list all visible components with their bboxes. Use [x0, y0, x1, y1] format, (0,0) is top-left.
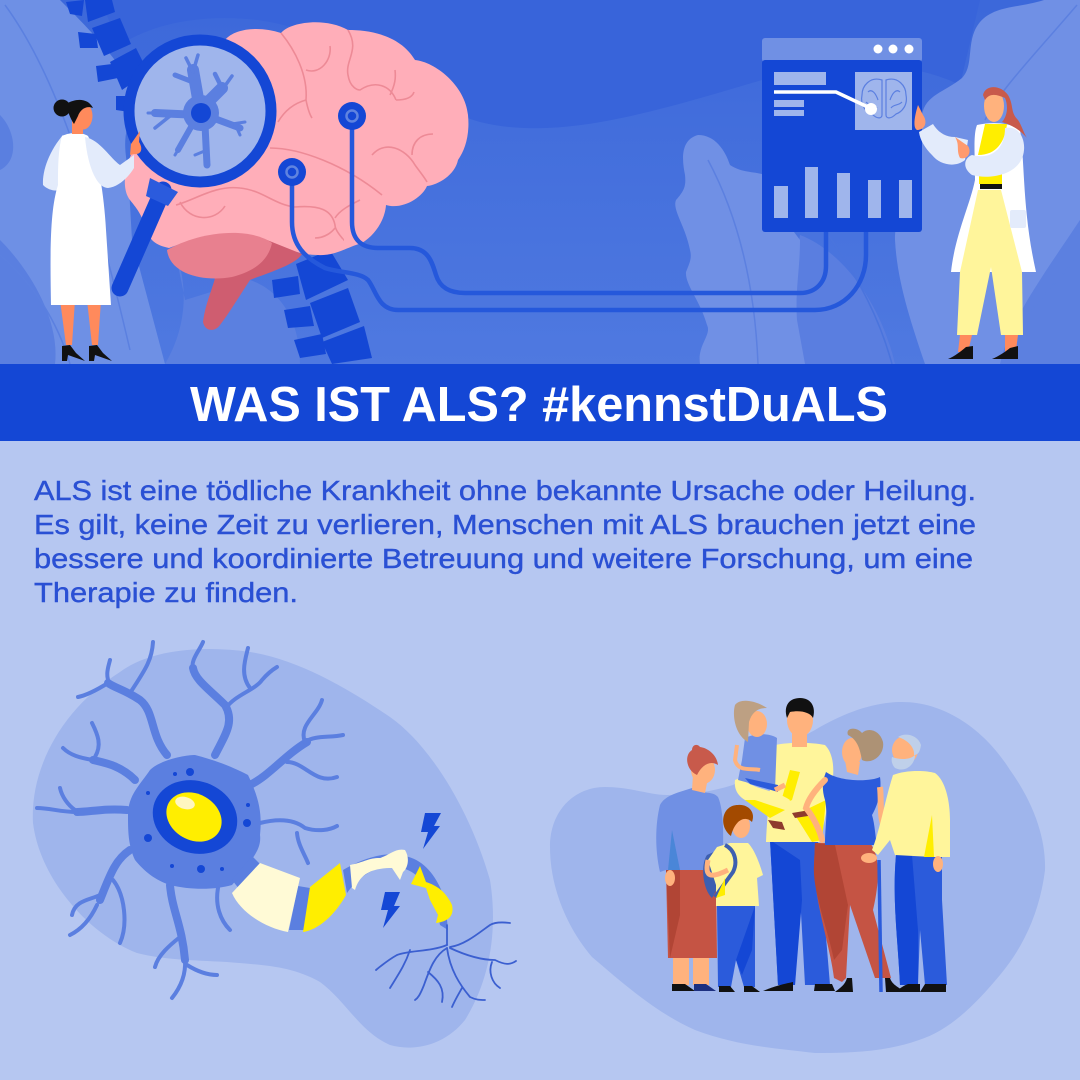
- shoes: [835, 978, 853, 992]
- lab coat: [951, 123, 1036, 272]
- hair: [898, 735, 921, 755]
- woman with magnifier: [43, 100, 141, 361]
- window dots: [874, 44, 914, 54]
- trousers: [895, 855, 947, 985]
- family background blob: [550, 702, 1045, 1053]
- sweater: [656, 788, 723, 872]
- child arm: [735, 745, 760, 770]
- hands: [914, 105, 925, 130]
- lens: [129, 40, 271, 182]
- lens soma: [183, 95, 219, 131]
- hair: [983, 87, 1027, 138]
- right background leaves: [675, 0, 1080, 364]
- boy trousers: [717, 906, 755, 987]
- woman left legs: [673, 957, 689, 985]
- arm across: [965, 128, 1024, 177]
- beard: [892, 755, 915, 770]
- arm left: [806, 780, 825, 840]
- nucleus: [157, 783, 231, 851]
- legs: [60, 300, 75, 345]
- brain folds: [176, 30, 433, 240]
- belt: [980, 184, 1002, 189]
- woman presenting: [914, 87, 1036, 359]
- boy shoes: [719, 986, 735, 992]
- trousers: [957, 190, 1023, 335]
- woman with ponytail: [656, 745, 723, 991]
- shoes: [948, 346, 973, 359]
- woman left shoes: [672, 984, 695, 991]
- axon: [232, 850, 453, 932]
- man head: [787, 703, 813, 737]
- backpack strap: [715, 845, 735, 897]
- child legs: [735, 778, 790, 822]
- damaged myelin yellow: [411, 866, 453, 923]
- elderly man: [861, 735, 950, 992]
- man trousers: [770, 840, 830, 985]
- coat pocket: [1010, 210, 1026, 228]
- window body: [762, 60, 922, 232]
- magnifying glass: [120, 40, 271, 288]
- man carrying child: [763, 698, 835, 991]
- myelin yellow: [303, 863, 346, 932]
- myelin cream: [232, 863, 300, 932]
- hand: [665, 870, 675, 886]
- woman in blue: [806, 729, 905, 992]
- damaged myelin cream: [350, 850, 408, 890]
- head: [984, 90, 1004, 122]
- monitor window: [762, 38, 922, 232]
- hair: [847, 729, 883, 761]
- head: [691, 756, 715, 784]
- magnifier collar: [146, 178, 178, 206]
- title band: [0, 364, 1080, 441]
- boy hair: [723, 805, 753, 836]
- hero background: [0, 0, 1080, 365]
- axon terminals: [376, 922, 516, 1007]
- neuron background blob: [33, 649, 493, 1048]
- nucleus highlight: [174, 795, 196, 811]
- lightning bolts: [381, 813, 441, 928]
- head: [842, 738, 862, 766]
- cane: [879, 860, 881, 992]
- electrodes: [278, 102, 366, 186]
- neck: [692, 775, 708, 793]
- trousers: [814, 843, 891, 982]
- lens nucleus: [191, 103, 211, 123]
- child hair: [734, 701, 767, 742]
- boy head: [732, 814, 750, 838]
- neuron illustration: [33, 642, 516, 1048]
- bar chart: [774, 167, 912, 218]
- intro text block: Therapie zu finden.: [34, 577, 298, 608]
- pointer line: [774, 92, 870, 108]
- skirt: [666, 870, 717, 958]
- man shoes: [763, 982, 793, 991]
- hair bun: [54, 100, 70, 116]
- text placeholders: [774, 72, 826, 116]
- shoes: [62, 345, 85, 361]
- sweater: [872, 771, 950, 857]
- head: [74, 102, 92, 130]
- top: [823, 772, 881, 845]
- head: [892, 736, 918, 764]
- right hand: [933, 856, 943, 872]
- man shirt: [766, 743, 833, 842]
- boy shirt: [708, 843, 763, 906]
- intro text block: ALS ist eine tödliche Krankheit ohne bekannte Ursache oder Heilung.: [34, 475, 976, 506]
- backpack: [703, 850, 722, 898]
- arm pointing: [919, 124, 968, 165]
- nucleus ring: [142, 768, 248, 866]
- child head: [747, 711, 767, 737]
- brain: [125, 22, 468, 255]
- intro text block: bessere und koordinierte Betreuung und weitere Forschung, um eine: [34, 543, 973, 574]
- left background leaves: [0, 0, 300, 364]
- hair: [687, 745, 718, 775]
- shirt shadow: [780, 770, 800, 805]
- spine upper: [66, 0, 148, 112]
- shoes: [895, 984, 920, 992]
- brain scan tile: [855, 72, 912, 130]
- intro text block: [34, 475, 976, 608]
- boy with backpack: [703, 805, 763, 992]
- neck: [845, 760, 860, 775]
- soma: [128, 755, 261, 889]
- soma dots: [144, 768, 251, 873]
- hand on cane: [861, 853, 877, 863]
- window header: [762, 38, 922, 62]
- arm right: [880, 787, 888, 835]
- dark top blob: [100, 0, 980, 128]
- dendrites: [37, 642, 343, 998]
- heading: WAS IST ALS? #kennstDuALS: [190, 378, 888, 432]
- child shoes: [768, 820, 785, 830]
- front arm: [85, 137, 134, 188]
- man hair: [786, 698, 814, 718]
- hair: [66, 100, 93, 124]
- lens neuron: [148, 55, 245, 165]
- man neck: [792, 732, 807, 747]
- pointer dot: [865, 103, 877, 115]
- cerebellum: [167, 233, 272, 279]
- legs: [958, 335, 972, 352]
- spine lower: [272, 250, 372, 364]
- yellow top: [978, 124, 1007, 155]
- neck: [72, 120, 83, 134]
- axon base: [232, 856, 262, 890]
- magnifier handle: [120, 190, 163, 288]
- hand: [130, 131, 141, 155]
- brainstem: [203, 238, 302, 330]
- boy arm: [707, 860, 728, 875]
- back arm: [43, 135, 68, 191]
- child carried: [734, 701, 810, 830]
- wires: [292, 117, 866, 310]
- intro text block: Es gilt, keine Zeit zu verlieren, Menschen mit ALS brauchen jetzt eine: [34, 509, 976, 540]
- hero illustration panel: [0, 0, 1080, 365]
- child shirt: [738, 734, 777, 790]
- dress: [51, 133, 111, 305]
- family illustration: [550, 698, 1045, 1053]
